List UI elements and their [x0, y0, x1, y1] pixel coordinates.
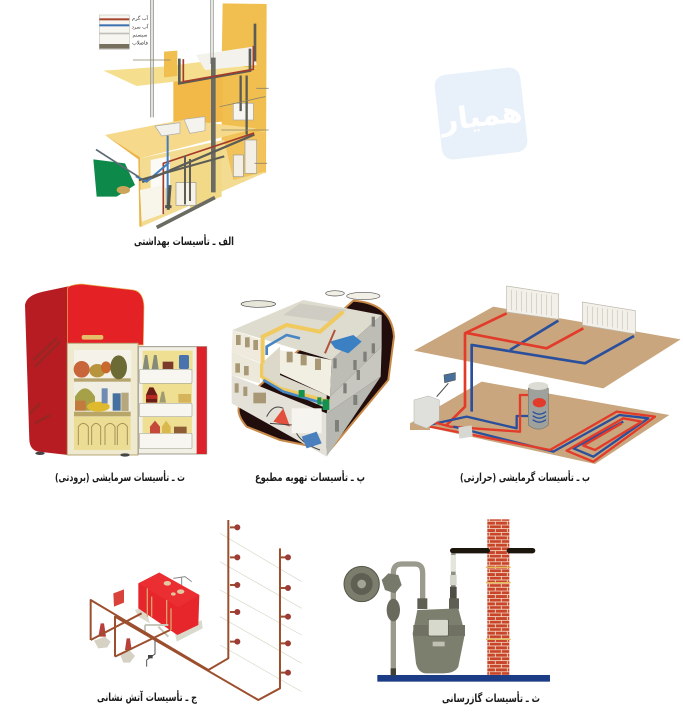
panel: fire fighting	[91, 520, 302, 705]
panel: heating	[410, 286, 681, 484]
watermark: hamyar logo	[434, 66, 529, 161]
caption: sanitary: الف ـ تأسیسات بهداشتی	[134, 234, 234, 248]
legend: آب گرم	[132, 15, 149, 22]
caption: air conditioning: پ ـ تأسیسات تهویه مطبوع	[255, 470, 365, 484]
panel: sanitary installations	[93, 0, 268, 248]
legend: آب سرد	[132, 24, 149, 31]
illustration: fire tank and sprinklers	[91, 520, 302, 700]
panel: air conditioning	[232, 291, 394, 484]
illustration: gas meter and brick wall	[344, 519, 550, 682]
structural and drain pipes	[97, 0, 268, 227]
illustration: open red refrigerator	[25, 284, 207, 457]
caption: fire fighting: ج ـ تأسیسات آتش نشانی	[97, 690, 197, 705]
legend: فاضلاب	[132, 41, 149, 47]
watermark: hamyar logo: همیار	[437, 94, 524, 139]
illustration: building plumbing cutaway	[93, 0, 268, 227]
caption: heating: ب ـ تأسیسات گرمایشی (حرارتی)	[460, 470, 590, 484]
legend	[99, 15, 149, 49]
illustration: building ventilation cutaway	[232, 291, 394, 457]
legend: سیستم	[133, 33, 147, 39]
panel: gas installation	[344, 519, 550, 705]
panel: refrigeration	[25, 284, 207, 484]
caption: gas installation: ث ـ تأسیسات گازرسانی	[442, 691, 540, 705]
illustration: radiators and pipes on two floors	[410, 286, 681, 464]
caption: refrigeration: ت ـ تأسیسات سرمایشی (برودتی)	[55, 470, 185, 484]
